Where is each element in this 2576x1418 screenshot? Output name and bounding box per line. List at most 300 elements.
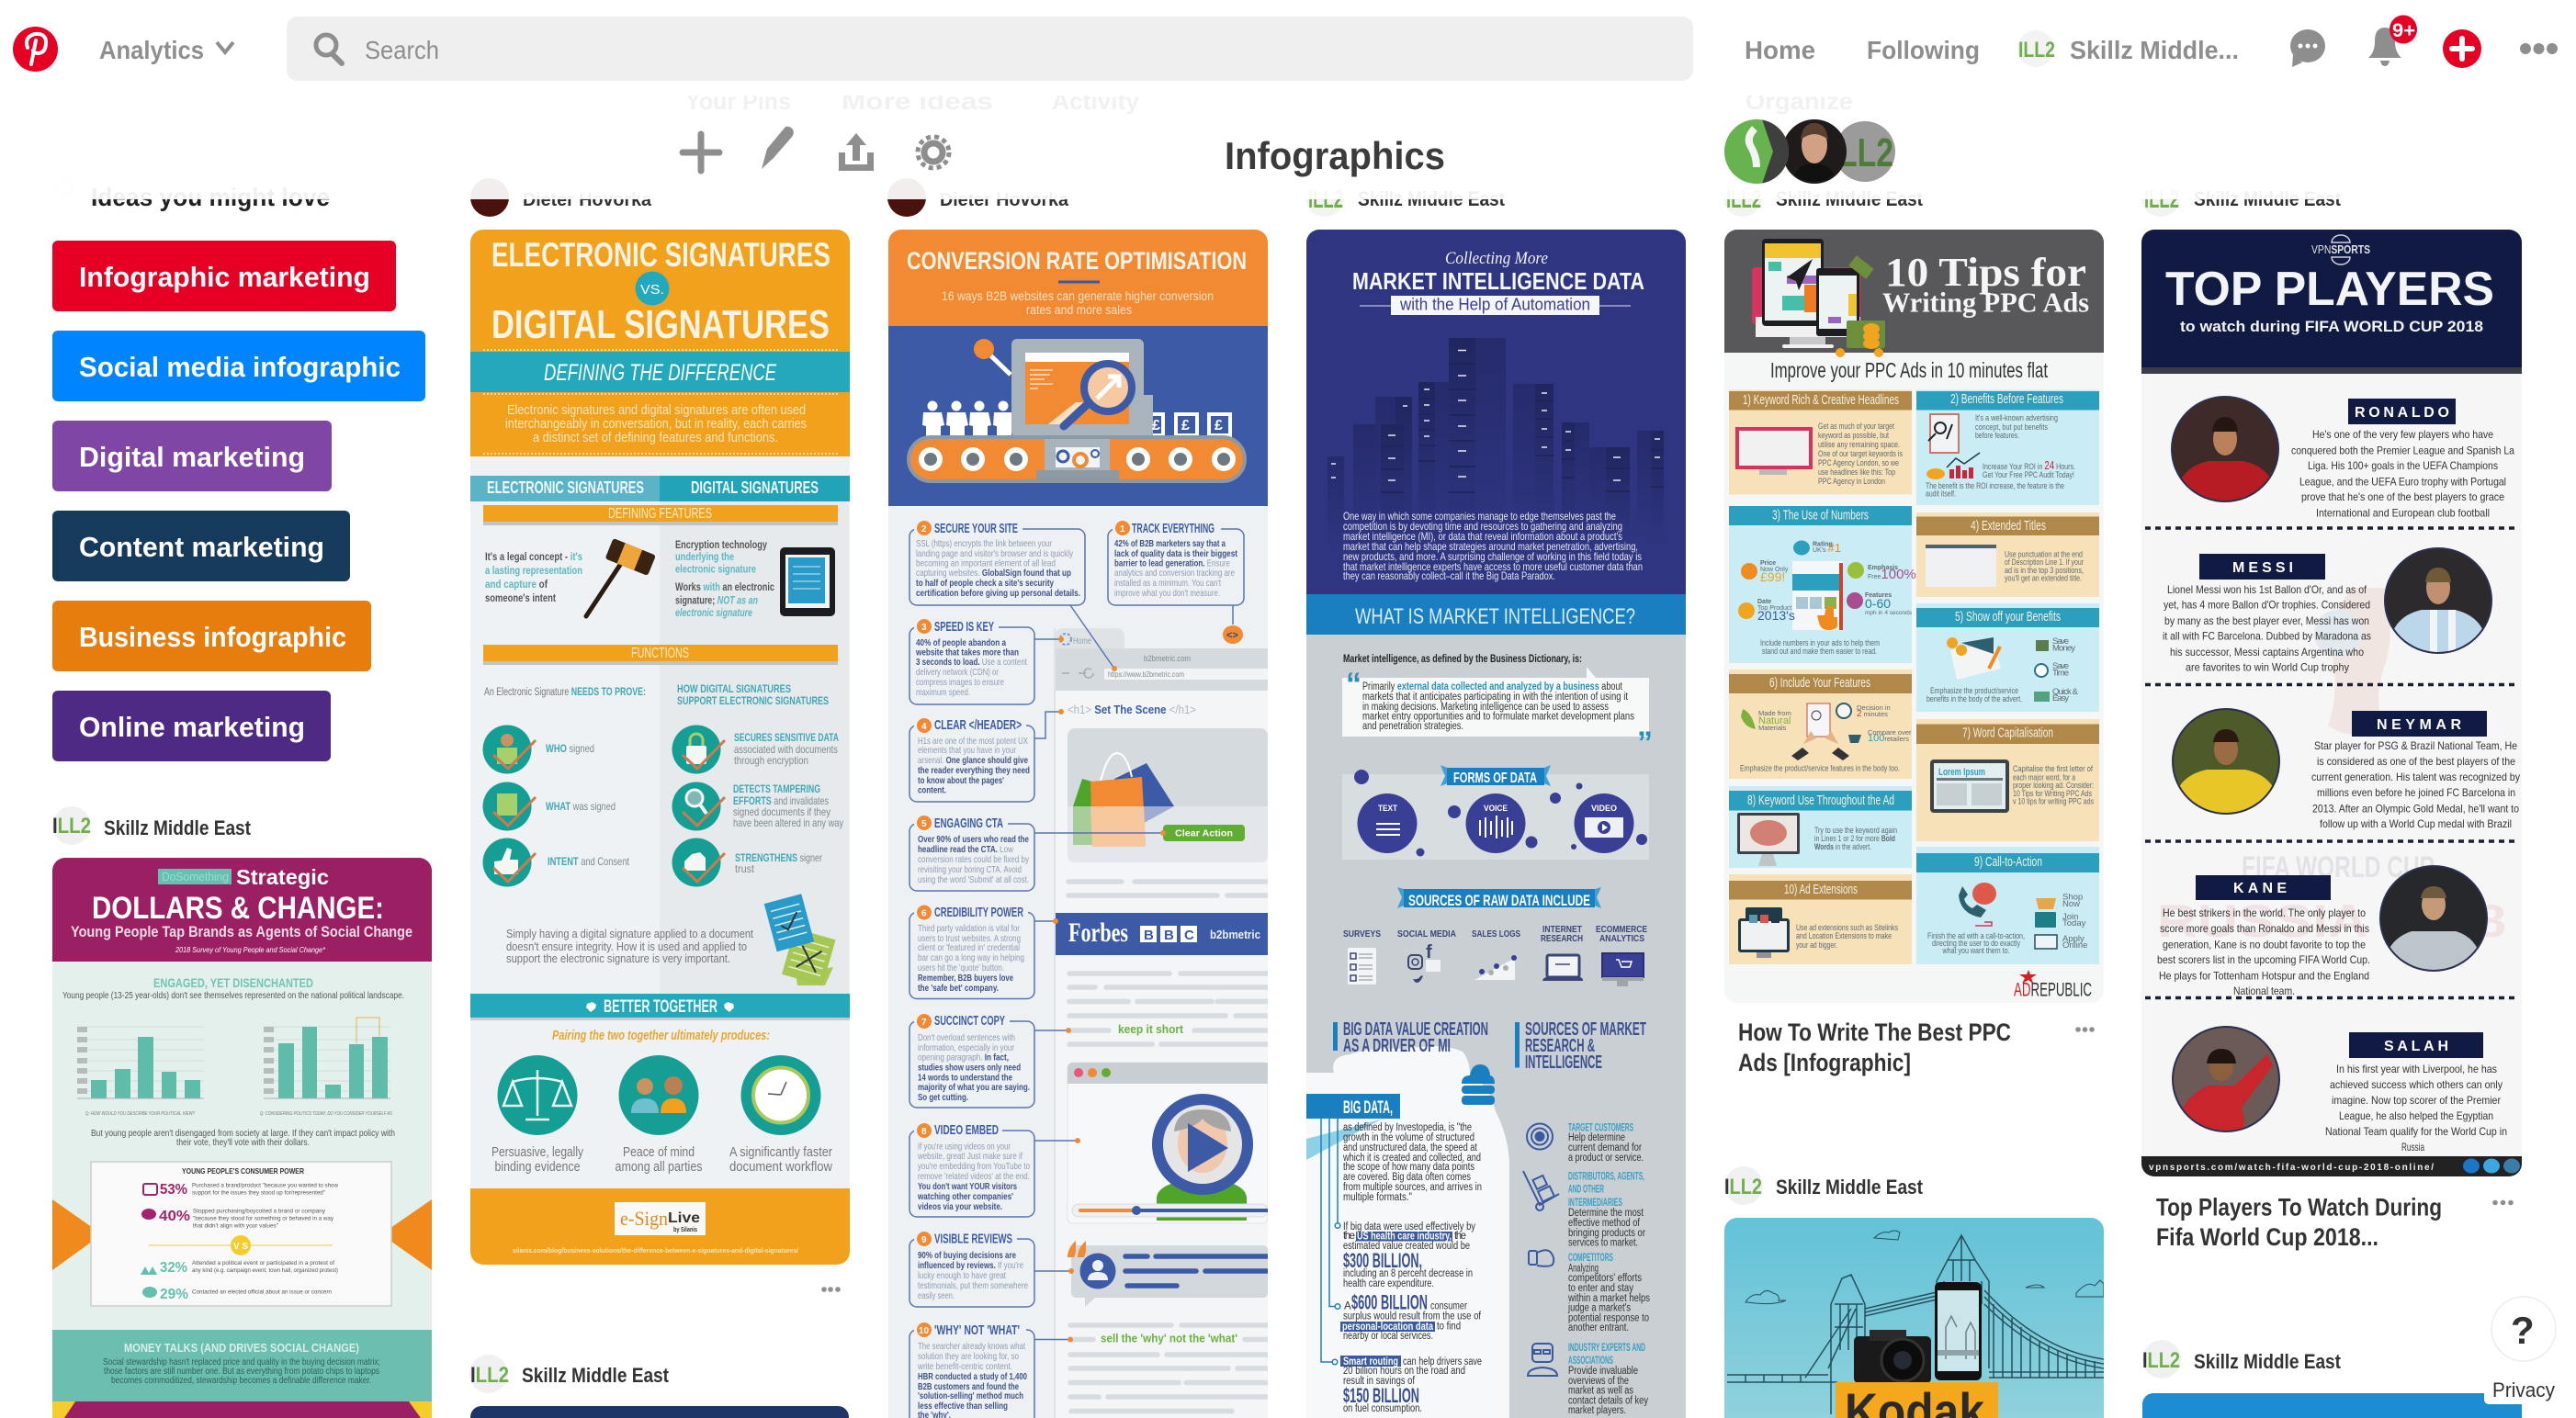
banner: sources of raw data include: SOURCES OF RAW DATA INCLUDE <box>1408 892 1590 909</box>
tip 5: engaging cta: using the word 'Submit' at all cost. <box>918 874 1029 885</box>
illustration: monitors and money <box>1752 239 1885 357</box>
icon: ecommerce monitor <box>1602 953 1644 986</box>
tip 1 panel: use headlines like this: Top <box>1818 467 1895 478</box>
tip 10: why not what <box>910 1322 1034 1418</box>
pin header: Skillz, column 2 lower: ILL2 <box>470 1363 509 1388</box>
stat: 600 billion: nearby or local services. <box>1343 1331 1433 1342</box>
panel: grey body <box>1306 635 1686 1418</box>
text block: market research sources: services to market. <box>1568 1238 1638 1249</box>
tip 2 panel: Get Your Free PPC Audit Today! <box>1983 470 2074 480</box>
tip 6: credibility power <box>910 905 1034 999</box>
collaborator avatars <box>1724 119 1895 184</box>
heading: sources of market research <box>1515 1019 1646 1073</box>
stat: 300 billion <box>1343 1221 1475 1289</box>
heading: title block: 2018 Survey of Young People and Social Change* <box>175 945 326 954</box>
tip 8: video embed: you're embedding from YouTube to <box>918 1161 1030 1172</box>
icon: cloud server <box>1462 1064 1495 1105</box>
player: ronaldo: He's one of the very few players who have <box>2312 428 2493 441</box>
player: kane: score more goals than Ronaldo and Messi in this <box>2160 922 2369 935</box>
player: messi: are favorites to win World Cup trophy <box>2186 661 2349 674</box>
tip 5 panel: Time <box>2052 669 2069 678</box>
panel: consumer power box <box>91 1162 391 1306</box>
tip 7: succinct copy <box>910 1013 1034 1108</box>
text block: integrity note <box>506 927 753 965</box>
banner: better together: BETTER TOGETHER <box>604 997 717 1017</box>
tip 9 panel: Apply <box>2062 934 2085 944</box>
stat: 150 billion: can help drivers save <box>1403 1356 1482 1367</box>
tip 10: why not what: B2B customers and found the <box>918 1381 1019 1392</box>
tip 6 panel: Emphasize the product/service features in the body too. <box>1740 764 1900 773</box>
text block: encryption technology: electronic signature <box>675 606 752 619</box>
tip 3 panel: Top Product <box>1757 605 1791 612</box>
text block: function labels: STRENGTHENS signer <box>735 851 822 864</box>
icon: social media <box>1408 942 1441 983</box>
heading: engaged yet disenchanted <box>62 979 404 1000</box>
bar chart: political views <box>77 1027 204 1117</box>
text block: big data definition: multiple formats." <box>1343 1192 1412 1203</box>
icon: gavel <box>586 538 656 616</box>
heading: conversion rate optimisation <box>907 247 1247 317</box>
text block: how digital signatures support: HOW DIGITAL SIGNATURES <box>677 682 791 695</box>
tip 4: clear header: CLEAR </HEADER> <box>934 717 1022 733</box>
tip 4: clear header: arsenal. One glance should give <box>918 755 1028 766</box>
tip 3: speed is key: 3 <box>921 623 927 633</box>
panel: consumer power box: 32% <box>160 1260 187 1276</box>
pin title: how to write the best ppc ads <box>1738 1018 2011 1076</box>
tip 7 panel <box>1916 719 2099 841</box>
icon: create pin <box>2443 29 2481 68</box>
pin title: how to write the best ppc ads: How To Write The Best PPC <box>1738 1018 2011 1046</box>
card: next pin in column 6 <box>2142 1393 2522 1418</box>
logo: pinterest <box>13 27 58 72</box>
tip 5: engaging cta: revisiting your boring CTA. Avoid <box>918 864 1022 875</box>
player: salah: League, he also helped the Egyptian <box>2339 1109 2493 1122</box>
text block: integrity note: doesn't ensure integrity. How it is used and applied to <box>506 940 747 953</box>
faded board sub-nav behind the sticky header: Organize <box>1746 87 1853 115</box>
panel: consumer power box: support for the issues they stood up for/represented" <box>192 1190 326 1196</box>
link: privacy <box>2484 1376 2562 1404</box>
text block: market research sources: market as well as <box>1568 1385 1633 1396</box>
menu dots: column 2 pin <box>821 1287 841 1292</box>
panel: consumer power box: Stopped purchasing/boycotted a brand or company <box>193 1209 326 1214</box>
tip 4 panel: 4) Extended Titles <box>1971 519 2046 534</box>
tip 5: engaging cta: headline read the CTA. Low <box>918 844 1013 855</box>
tip 3: speed is key: delivery network (CDN) or <box>916 667 999 678</box>
tip 9 panel <box>1916 847 2099 964</box>
panel: orange title area <box>470 230 850 456</box>
text block: encryption technology: electronic signature <box>675 562 756 575</box>
text block: function labels: trust <box>735 862 755 875</box>
dashed player separators <box>2145 528 2518 997</box>
player: neymar: is considered as one of the best players of the <box>2317 755 2515 768</box>
icon: messages <box>2290 29 2325 67</box>
text block: market research sources: INDUSTRY EXPERTS AND <box>1568 1341 1645 1354</box>
text block: market research sources: competitors' efforts <box>1568 1273 1642 1284</box>
pin header: Skillz Middle East, column 1: Skillz Middle East <box>104 816 252 839</box>
text block: encryption technology <box>675 538 774 619</box>
tip 9 panel: Join <box>2062 912 2078 922</box>
pin header: Skillz, column 6: Skillz Middle East <box>2194 187 2342 210</box>
tag: online marketing: Online marketing <box>79 711 305 743</box>
tag: content marketing: Content marketing <box>79 531 324 563</box>
text block: market research sources: within a market helps <box>1567 1293 1650 1304</box>
tip 8: video embed: You don't want YOUR visitors <box>918 1181 1017 1192</box>
icon: edit pencil <box>762 127 794 169</box>
tip 7: succinct copy: Don't overload sentences with <box>918 1032 1015 1043</box>
tip 6 panel: Made from <box>1758 709 1791 717</box>
panel: magenta title area <box>52 858 432 962</box>
tip 4: clear header <box>910 717 1034 802</box>
panel: consumer power box: that didn't align with your values" <box>193 1223 279 1229</box>
banner: defining the difference <box>470 350 850 454</box>
text block: outcome captions: among all parties <box>616 1159 702 1175</box>
text block: market research sources: AND OTHER <box>1568 1183 1604 1196</box>
banner: comparison header: ELECTRONIC SIGNATURES <box>487 478 644 497</box>
tip 1 panel: Get as much of your target <box>1818 422 1894 432</box>
tag: business infographic: Business infographic <box>79 621 346 653</box>
icon: survey sheet <box>1348 948 1376 985</box>
link: privacy: Privacy <box>2492 1379 2555 1401</box>
tip 2: secure your site: SSL (https) encrypts the link between your <box>916 538 1052 549</box>
panel: money talks: MONEY TALKS (AND DRIVES SOCIAL CHANGE) <box>124 1341 359 1355</box>
heading: infographics: Infographics <box>1225 134 1445 177</box>
banner: press logos: B <box>1144 928 1154 943</box>
tip 1: track everything: 1 <box>1120 524 1125 535</box>
tip 10 panel: 10) Ad Extensions <box>1784 883 1858 897</box>
tip 4 panel: ad is in the top 3 positions, <box>2005 566 2084 576</box>
player: messi: it all with FC Barcelona. Dubbed by Maradona as <box>2163 630 2371 643</box>
stat: 600 billion: consumer <box>1430 1300 1467 1311</box>
tip 3 panel: 2013's <box>1757 608 1795 623</box>
heading: title block: Young People Tap Brands as Agents of Social Change <box>71 924 412 940</box>
text block: market research sources: COMPETITORS <box>1568 1251 1613 1264</box>
collaborator avatars: LL2 <box>1838 130 1893 175</box>
player: kane: best scorers list in the upcoming FIFA World Cup. <box>2157 953 2370 966</box>
text block: introduction: market intelligence (MI), or data that reveal information about a product's <box>1343 530 1622 543</box>
tip 4 panel: you'll get an extended title. <box>2005 573 2082 584</box>
tip 3: speed is key: compress images to ensure <box>916 677 1004 688</box>
tip 1 panel: PPC Agency London, so we <box>1818 458 1899 468</box>
heading: digital signatures: DIGITAL SIGNATURES <box>491 302 830 347</box>
tip 1: track everything: 42% of B2B marketers say that a <box>1114 538 1226 549</box>
text block: market research sources: contact details of key <box>1568 1396 1648 1407</box>
tip 6: credibility power: users hit the 'quote' button. <box>918 962 1004 973</box>
heading: sources of market research: INTELLIGENCE <box>1525 1052 1602 1073</box>
arrow: left orange triangle <box>52 1199 90 1270</box>
logo: adrepublic <box>2014 970 2092 1001</box>
icon: boxing glove <box>1529 1250 1554 1266</box>
tip 3 panel: 0-60 <box>1865 596 1891 611</box>
tip 3 panel: UK's #1 <box>1813 541 1841 555</box>
tip 6: credibility power: bar can go a long way in helping <box>918 952 1024 963</box>
tip 3 panel: Emphasis <box>1868 565 1898 571</box>
pin header: Skillz, column 5 lower <box>1724 1166 1924 1205</box>
pin header: Skillz, column 6 lower: ILL2 <box>2142 1348 2180 1373</box>
panel: forms of data: FORMS OF DATA <box>1453 771 1537 786</box>
menu: analytics: Analytics <box>99 36 204 64</box>
search bar: Search <box>365 36 439 64</box>
panel: orange footer: silanis.com/blog/business-solutions/the-difference-between-e-signatures-and-digital-signatures/ <box>513 1246 799 1255</box>
stat: 300 billion: the <box>1343 1231 1355 1242</box>
pin header: Skillz, column 2 lower: Skillz Middle East <box>522 1364 670 1387</box>
tip 9: visible reviews: easily seen. <box>918 1290 955 1301</box>
text block: big data definition: growth in the volume of structured <box>1343 1132 1474 1143</box>
player: neymar: NEYMAR <box>2377 717 2461 733</box>
heading: collecting more market intelligence data: MARKET INTELLIGENCE DATA <box>1352 267 1644 295</box>
player: salah <box>2168 1024 2507 1154</box>
tip 10: why not what: 'solution-selling' method much <box>918 1390 1023 1401</box>
pin header: Skillz, column 5: ILL2 <box>1726 185 1761 213</box>
text block: big data definition: which it is created and collected, and <box>1342 1153 1481 1164</box>
logo: DoSomething: DoSomething <box>162 870 229 883</box>
icon: laptop <box>1542 955 1583 981</box>
panel: forms of data: VOICE <box>1484 804 1508 813</box>
tip 9 panel: directing the user to do exactly <box>1932 939 2020 949</box>
stat: 300 billion: including an 8 percent decrease in <box>1343 1268 1473 1279</box>
player: ronaldo: prove that he's one of the best players to grace <box>2301 490 2504 503</box>
tag: online marketing <box>52 691 331 761</box>
tip 8 panel: Words in the advert. <box>1814 842 1871 852</box>
tag: digital marketing: Digital marketing <box>79 441 305 473</box>
tip 6 panel: Compare over <box>1868 728 1912 737</box>
pin header: Dieter Hovorka, column 2 <box>470 178 652 217</box>
text block: needs to prove: An Electronic Signature NEEDS TO PROVE: <box>484 687 646 698</box>
tip 7 panel: Lorem Ipsum <box>1938 767 1985 778</box>
player: messi: Lionel Messi won his 1st Ballon d'Or, and as of <box>2167 583 2367 596</box>
tip 2: secure your site: becoming an important element of all lead <box>916 558 1056 569</box>
icon: code tag: <> <box>1226 630 1238 641</box>
tip 1: track everything: analytics and conversion tracking are <box>1114 568 1235 579</box>
tip 7 panel: 7) Word Capitalisation <box>1962 726 2053 740</box>
illustration: phone <box>1935 1282 1982 1380</box>
tip 2 panel: 2) Benefits Before Features <box>1950 392 2063 407</box>
watermark: world cup trophy: RUSSIA 2018 <box>2157 895 2506 947</box>
tip 3 panel: stand out and make them easier to read. <box>1762 647 1877 657</box>
tip 8: video embed: remove 'related videos' at the end. <box>918 1171 1030 1182</box>
callout: definition quote: ” <box>1637 726 1653 760</box>
text block: introduction: that market intelligence experts have access to more useful customer data than <box>1343 560 1643 573</box>
panel: navy title area <box>1306 230 1686 594</box>
panel: consumer power box: Purchased a brand/product "because you wanted to show <box>192 1183 338 1188</box>
tip 10: why not what: solution they are looking for, so <box>918 1351 1019 1362</box>
stat: 300 billion: US health care industry, <box>1357 1231 1452 1242</box>
text block: market research sources: to enter and stay <box>1568 1283 1633 1294</box>
stat: 600 billion: surplus would result from the use of <box>1343 1311 1482 1322</box>
decorative hatched strip <box>2141 367 2522 374</box>
heading: title block: Strategic <box>236 865 329 889</box>
tip 2: secure your site: capturing websites. GlobalSign found that up <box>916 568 1071 579</box>
tip 3 panel: Features <box>1865 592 1892 599</box>
pin header: Skillz Middle East, column 1: ILL2 <box>52 814 91 838</box>
tip 3 panel: Price <box>1760 560 1776 567</box>
text block: source labels: ECOMMERCE <box>1596 925 1647 935</box>
logo: adrepublic: ADREPUBLIC <box>2014 979 2092 1001</box>
text block: function labels: WHAT was signed <box>546 800 616 813</box>
text block: source labels <box>1343 925 1647 944</box>
panel: money talks: becomes commoditized, stewardship becomes a definable difference maker. <box>111 1376 371 1386</box>
faded board sub-nav behind the sticky header: Your Pins <box>685 87 791 115</box>
tip 9: visible reviews: testimonials, put them somewhere <box>918 1280 1028 1291</box>
tip 2: secure your site: landing page and visitor's browser and is quickly <box>916 548 1074 559</box>
callout: definition quote: Primarily external data collected and analyzed by a business about <box>1362 681 1623 692</box>
tip 7: succinct copy: 7 <box>921 1018 927 1028</box>
infographic: top players <box>2141 230 2522 1176</box>
tip 2 panel: The benefit is the ROI increase, the feature is the <box>1926 481 2064 491</box>
tip 8 panel: Try to use the keyword again <box>1814 826 1897 836</box>
banner: defining features: DEFINING FEATURES <box>608 506 712 522</box>
pin header: Dieter Hovorka, column 3 <box>887 178 1069 217</box>
heading: sources of market research: RESEARCH & <box>1525 1036 1595 1056</box>
text block: market research sources: market players. <box>1568 1405 1626 1416</box>
tip 5 panel: 5) Show off your Benefits <box>1955 610 2061 625</box>
tip 10 panel: Use ad extensions such as Sitelinks <box>1796 923 1898 933</box>
text block: outcome captions <box>491 1144 832 1175</box>
tip 10: why not what: less effective than selling <box>918 1401 1008 1412</box>
tip 4: clear header: 4 <box>921 722 927 732</box>
tip 4 panel: Use punctuation at the end <box>2005 549 2083 560</box>
icon: code tag <box>1223 625 1243 644</box>
panel: consumer power box: VS <box>233 1242 248 1252</box>
pin header: Skillz, column 6: ILL2 <box>2144 185 2179 213</box>
banner: press logos: C <box>1184 928 1194 943</box>
panel: light body <box>2141 230 2522 1176</box>
board toolbar <box>683 119 1895 184</box>
tip 6 panel: Materials <box>1758 724 1787 732</box>
panel: consumer power box: 53% <box>160 1182 187 1198</box>
button: help <box>2491 1297 2556 1361</box>
infographic: electronic vs digital signatures <box>470 230 850 1265</box>
banner: sources of raw data include <box>1397 887 1601 909</box>
panel: blue machine illustration: £ <box>1152 418 1160 433</box>
tip 9 panel: Online <box>2062 940 2087 951</box>
text block: market research sources: bringing products or <box>1568 1228 1645 1239</box>
text block: big data definition <box>1342 1122 1482 1203</box>
tip 6 panel: Natural <box>1758 715 1791 726</box>
text block: source labels: SURVEYS <box>1343 929 1381 940</box>
text block: market research sources: Analyzing <box>1568 1264 1599 1275</box>
tip 7: succinct copy: opening paragraph. In fact, <box>918 1052 1009 1064</box>
tip 6: credibility power: the 'safe bet' company. <box>918 983 999 994</box>
tip 5 panel: Quick & <box>2052 687 2079 697</box>
illustration: testimonial bubble <box>1068 1241 1268 1307</box>
text block: function labels: signed documents if they <box>733 805 830 818</box>
tip 10 panel: and Location Extensions to make <box>1796 931 1892 941</box>
tip 5: engaging cta: 5 <box>921 819 927 829</box>
text block: market research sources: Determine the most <box>1568 1208 1644 1219</box>
stat: 150 billion: result in savings of <box>1343 1376 1416 1387</box>
icon: scales of justice <box>498 1055 577 1135</box>
watermark: world cup trophy <box>2157 588 2506 947</box>
panel: consumer power box: Contacted an elected official about an issue or concern <box>192 1289 332 1295</box>
banner: press logos: Forbes <box>1068 917 1128 948</box>
text block: intro: interchangeably in conversation, but in reality, each carries <box>505 417 807 432</box>
tip 5: engaging cta: conversion rates could be fixed by <box>918 854 1030 865</box>
pin title: how to write the best ppc ads: Ads [Infographic] <box>1738 1049 1911 1076</box>
icon: tablet <box>780 547 835 616</box>
text block: big data definition: the scope of how many data points <box>1343 1162 1474 1173</box>
tip 9 panel: 9) Call-to-Action <box>1974 855 2042 870</box>
panel: orange footer: by Silanis <box>673 1227 697 1233</box>
tip 10: why not what: 'WHY' NOT 'WHAT' <box>934 1322 1020 1338</box>
text block: outcome captions: binding evidence <box>494 1159 581 1175</box>
player: neymar <box>2168 707 2520 830</box>
tip 9 panel: Today <box>2062 918 2086 928</box>
heading: collecting more market intelligence data <box>1352 249 1644 315</box>
heading: top players: TOP PLAYERS <box>2165 263 2494 316</box>
tip 2: secure your site: to half of people check a site's security <box>916 578 1054 589</box>
bar chart: political affiliation <box>260 1018 392 1117</box>
heading: 10 tips: Writing PPC Ads <box>1882 287 2089 318</box>
tip 7: succinct copy: studies show users only need <box>918 1062 1021 1073</box>
tag: social media infographic <box>52 331 425 401</box>
tip 2 panel: concept, but put benefits <box>1975 422 2048 433</box>
text block: intro <box>505 403 807 445</box>
icon: signed documents <box>764 894 836 985</box>
stat: 150 billion: Smart routing <box>1343 1356 1398 1367</box>
text block: outcome captions: document workflow <box>729 1159 832 1175</box>
tip 10 panel <box>1729 874 1912 964</box>
banner: big data <box>1306 1094 1400 1119</box>
tip 7: succinct copy: So get cutting. <box>918 1092 968 1103</box>
bar chart: political views: Q: HOW WOULD YOU DESCRIBE YOUR POLITICAL VIEW? <box>85 1111 196 1117</box>
panel: forms of data: VIDEO <box>1591 804 1617 813</box>
callout: browser mockup: https://www.b2bmetric.com <box>1108 670 1184 679</box>
player: salah: Russia <box>2401 1141 2424 1154</box>
tip 4: clear header: to know about the pages' <box>918 775 1004 786</box>
pin header: Skillz, column 6 <box>2141 178 2342 217</box>
panel: footer bar <box>2141 1156 2522 1176</box>
pin header: Skillz, column 5: Skillz Middle East <box>1776 187 1924 210</box>
tip 6 panel <box>1729 670 1912 779</box>
banner: press logos <box>1056 913 1268 955</box>
pin header: Skillz, column 4: Skillz Middle East <box>1358 187 1506 210</box>
tip 1 panel: One of our target keywords is <box>1818 449 1903 459</box>
callout: definition quote: market entry opportunities and to formulate market development plans <box>1362 711 1634 722</box>
stat: 600 billion <box>1340 1291 1482 1342</box>
tip 2 panel: Increase Your ROI in 24 Hours. <box>1983 458 2075 472</box>
player: neymar: current generation. His talent was recognized by <box>2311 771 2520 783</box>
panel: orange title <box>888 230 1268 326</box>
panel: footer bar: vpnsports.com/watch-fifa-world-cup-2018-online/ <box>2149 1163 2434 1173</box>
tip 2: secure your site: SECURE YOUR SITE <box>934 521 1018 536</box>
tip 1: track everything: improve what you don't measure. <box>1114 588 1220 599</box>
panel: forms of data <box>1342 765 1649 860</box>
tip 8: video embed: watching other companies' <box>917 1191 1013 1202</box>
text block: vote with their dollars: But young people aren't disengaged from society at large. If they can't impact policy with <box>91 1128 395 1139</box>
text block: big data definition: and unstructured data, the speed at <box>1343 1142 1478 1154</box>
tip 10: why not what: 10 <box>919 1326 930 1336</box>
icon: hand truck <box>1523 1171 1559 1210</box>
nav profile: Skillz: Skillz Middle... <box>2070 36 2239 64</box>
panel: orange footer: Live <box>668 1210 700 1226</box>
logo: vpnsports <box>2311 235 2370 264</box>
player: neymar: Star player for PSG & Brazil National Team, He <box>2314 739 2517 752</box>
tip 3 panel: Free100% <box>1868 567 1916 582</box>
player: kane: National team. <box>2233 985 2295 997</box>
pin header: Skillz, column 2 lower <box>469 1355 670 1393</box>
tip 8: video embed: VIDEO EMBED <box>934 1122 999 1138</box>
player: salah: achieved success which others can only <box>2330 1078 2503 1091</box>
card: next pin in column 2 <box>470 1406 849 1418</box>
label: keep it short: keep it short <box>1118 1022 1184 1036</box>
panel: consumer power box: any kind (e.g. campaign event, town hall, organized protest) <box>192 1267 338 1274</box>
menu dots: column 5 pin <box>2075 1027 2095 1032</box>
text block: introduction: One way in which some companies manage to edge themselves past the <box>1343 510 1616 523</box>
icon: share <box>839 133 874 171</box>
panel: money talks: those factors are still number one. But as everything from potato chips to laptops <box>104 1367 379 1377</box>
text block: pairing line: Pairing the two together ultimately produces: <box>552 1028 770 1043</box>
tip 7 panel: v 10 tips for writing PPC ads <box>2013 797 2094 806</box>
